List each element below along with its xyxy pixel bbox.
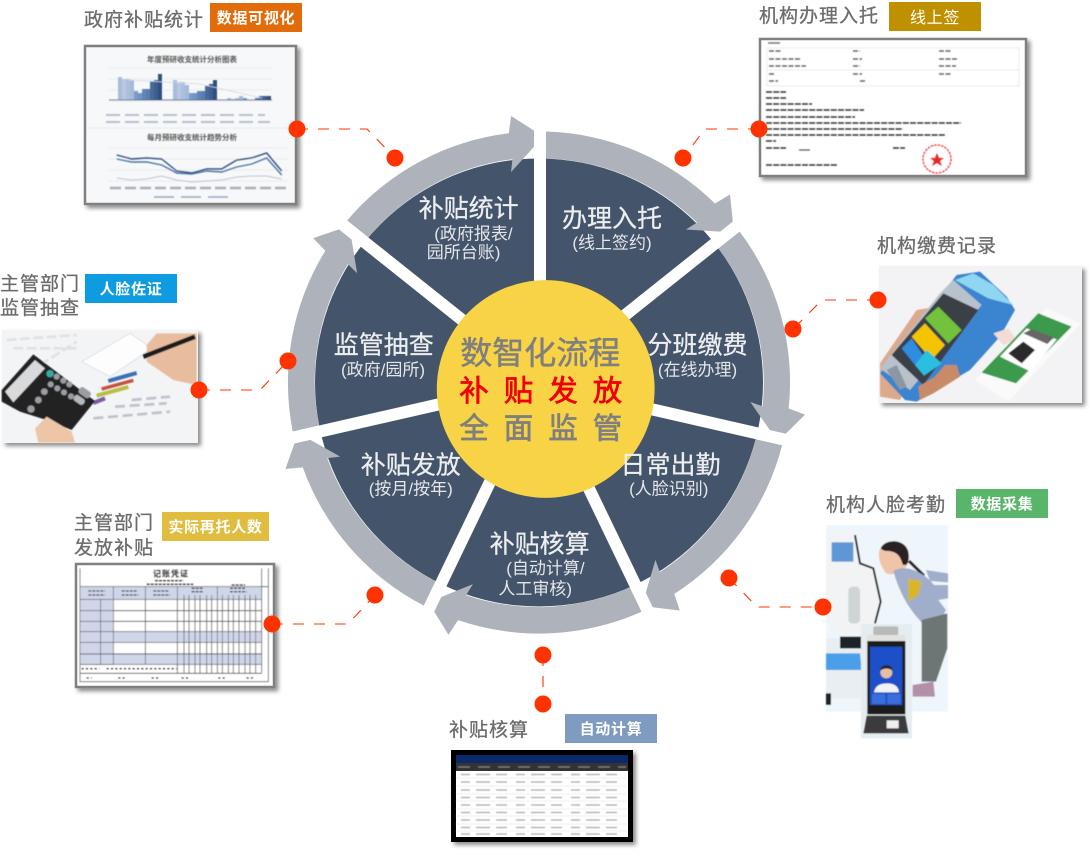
- circular arrows: [251, 74, 857, 693]
- segment: 补贴统计: (政府报表/: [434, 224, 513, 243]
- badge: 线上签: [910, 9, 960, 27]
- panel: 机构办理入托: [759, 2, 1026, 176]
- badge: 自动计算: [580, 720, 642, 738]
- heading: 政府补贴统计: [84, 9, 204, 31]
- connector: 主管部门监管抽查: [190, 352, 296, 398]
- badge: [956, 489, 1048, 518]
- segment: 分班缴费: (在线办理): [658, 360, 737, 379]
- panel: 补贴核算: [449, 714, 657, 842]
- heading: [0, 273, 80, 319]
- center title: 补贴发放: [459, 375, 637, 408]
- wheel dark disc: [315, 158, 763, 606]
- segment: 日常出勤: [620, 451, 721, 499]
- connector: 政府补贴统计: [288, 120, 404, 166]
- segment: 补贴统计: 补贴统计: [419, 195, 519, 223]
- connector: 补贴核算: [534, 646, 552, 712]
- panel: 主管部门发放补贴: [74, 512, 274, 687]
- segment: 补贴发放: 补贴发放: [361, 451, 461, 479]
- connector: 机构办理入托: [674, 120, 768, 166]
- badge: [889, 2, 981, 31]
- photo: calculator and hand: [2, 330, 198, 443]
- badge: [565, 714, 657, 743]
- badge: 数据采集: [971, 495, 1033, 513]
- connector: 机构人脸考勤: [720, 570, 832, 616]
- badge: 人脸佐证: [100, 280, 162, 298]
- heading: 机构办理入托: [759, 5, 879, 27]
- segment: 补贴统计: [419, 195, 519, 262]
- accounting voucher: 记账凭证: [153, 568, 189, 578]
- badge: [162, 512, 269, 541]
- segment: 补贴发放: (按月/按年): [369, 480, 453, 499]
- segment: 日常出勤: (人脸识别): [629, 480, 708, 499]
- segment: 补贴核算: 人工审核): [498, 579, 572, 598]
- process wheel: [251, 74, 857, 693]
- segment: 补贴统计: 园所台账): [427, 243, 500, 262]
- contract screenshot: [760, 39, 1026, 176]
- accounting voucher: [76, 564, 274, 687]
- segment: 补贴发放: [361, 451, 461, 499]
- segment: 分班缴费: 分班缴费: [647, 331, 748, 359]
- center yellow circle: [437, 280, 655, 498]
- panel: 主管部门监管抽查: [0, 273, 198, 443]
- connector: 机构缴费记录: [784, 292, 886, 338]
- heading: [74, 512, 154, 559]
- heading: 发放补贴: [74, 537, 154, 559]
- segment: 补贴核算: (自动计算/: [506, 559, 585, 578]
- chart screenshot: [85, 46, 296, 204]
- heading: 机构人脸考勤: [826, 494, 946, 516]
- connector: 主管部门发放补贴: [264, 586, 384, 632]
- badge: [210, 3, 302, 32]
- segment: 监管抽查: (政府/园所): [341, 360, 425, 379]
- center title: [459, 335, 637, 446]
- heading: 补贴核算: [449, 719, 529, 741]
- photo: child at face scanner: [826, 525, 948, 738]
- table screenshot: [451, 750, 633, 842]
- segment: 办理入托: [562, 205, 662, 252]
- heading: 主管部门: [74, 512, 154, 534]
- panel: 机构缴费记录: [877, 235, 1082, 403]
- segment: 监管抽查: [334, 331, 434, 379]
- center title: 全面监管: [459, 412, 637, 446]
- segment: 办理入托: 办理入托: [562, 205, 662, 233]
- segment: 日常出勤: 日常出勤: [620, 451, 721, 479]
- heading: 主管部门: [0, 273, 80, 295]
- badge: [85, 274, 177, 303]
- chart screenshot: 年度预研收支统计分析图表: [147, 54, 237, 64]
- badge: 实际再托人数: [168, 518, 263, 536]
- segment: 监管抽查: 监管抽查: [334, 331, 434, 359]
- segment: 办理入托: (线上签约): [572, 234, 652, 252]
- badge: 数据可视化: [217, 9, 295, 27]
- panel: 政府补贴统计: [84, 3, 302, 204]
- segment: 补贴核算: [490, 531, 590, 598]
- photo: payment terminal and phone: [879, 266, 1082, 403]
- segment: 补贴核算: 补贴核算: [490, 531, 590, 559]
- segment: 分班缴费: [647, 331, 748, 379]
- heading: 机构缴费记录: [877, 235, 997, 257]
- heading: 监管抽查: [0, 297, 80, 319]
- center title: 数智化流程: [460, 335, 620, 371]
- chart screenshot: 每月预研收支统计趋势分析: [147, 132, 237, 142]
- panel: 机构人脸考勤: [826, 489, 1048, 738]
